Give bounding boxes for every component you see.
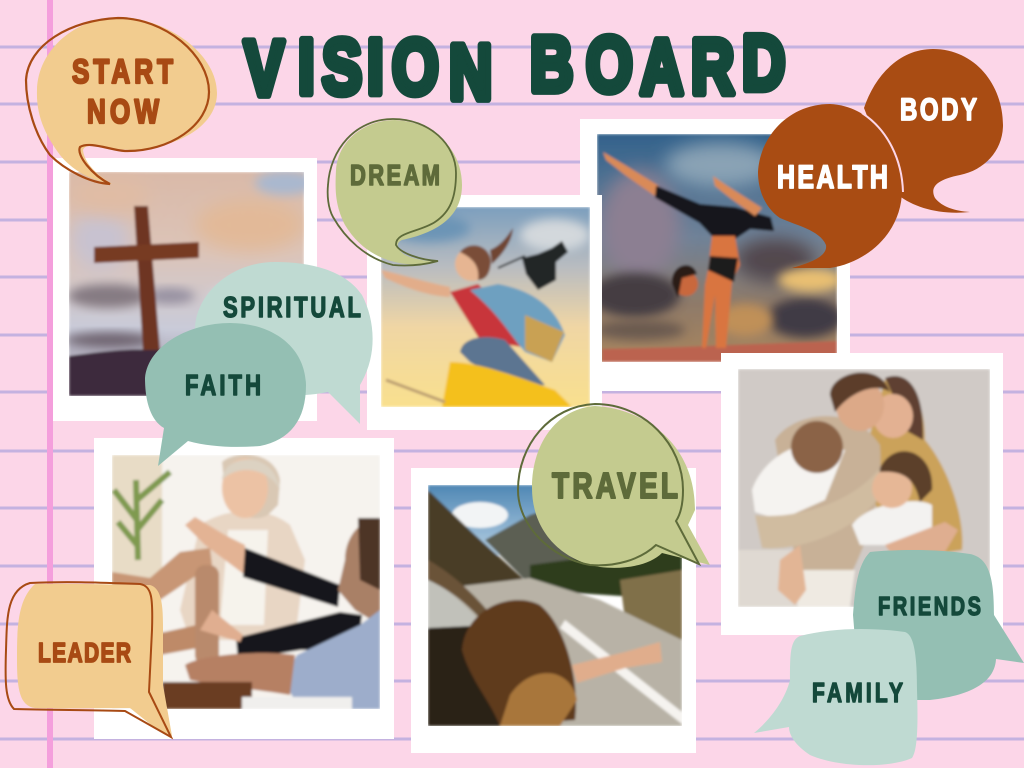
bubble text: spiritual: SPIRITUAL [223, 292, 361, 324]
speech bubble: body [864, 49, 1003, 213]
speech bubble: start now [26, 17, 217, 184]
speech bubble: faith [145, 323, 306, 466]
bubble text: body: BODY [900, 92, 977, 127]
photo: road trip out of car window [411, 468, 696, 753]
speech bubble: dream [328, 119, 462, 266]
speech bubble: leader [6, 582, 172, 737]
photo: girl with camera on suitcase [367, 195, 602, 430]
bubble text: start now: START [72, 54, 173, 91]
photo: family hug [721, 353, 1003, 635]
bubble text: start now: NOW [87, 94, 159, 131]
title [244, 19, 785, 116]
title: BOARD [530, 19, 785, 110]
bubble text: friends: FRIENDS [878, 591, 981, 621]
bubble text: start now [72, 54, 173, 131]
photo: cross in the sky [53, 158, 317, 421]
bubble text: faith: FAITH [185, 370, 261, 402]
photo: yoga handstand at sunset [580, 119, 850, 391]
speech bubble: family [754, 629, 917, 765]
speech bubble: friends [853, 550, 1024, 700]
photo: team stacking hands [94, 438, 394, 739]
bubble text: family: FAMILY [812, 678, 903, 709]
bubble text: dream: DREAM [350, 160, 440, 192]
speech bubble: health [758, 104, 903, 268]
speech bubble: travel [518, 404, 710, 568]
bubble text: travel: TRAVEL [552, 465, 678, 506]
bubble text: leader: LEADER [38, 638, 131, 669]
speech bubble: spiritual [195, 262, 373, 424]
title: VISION [244, 23, 492, 116]
bubble text: health: HEALTH [777, 160, 888, 196]
